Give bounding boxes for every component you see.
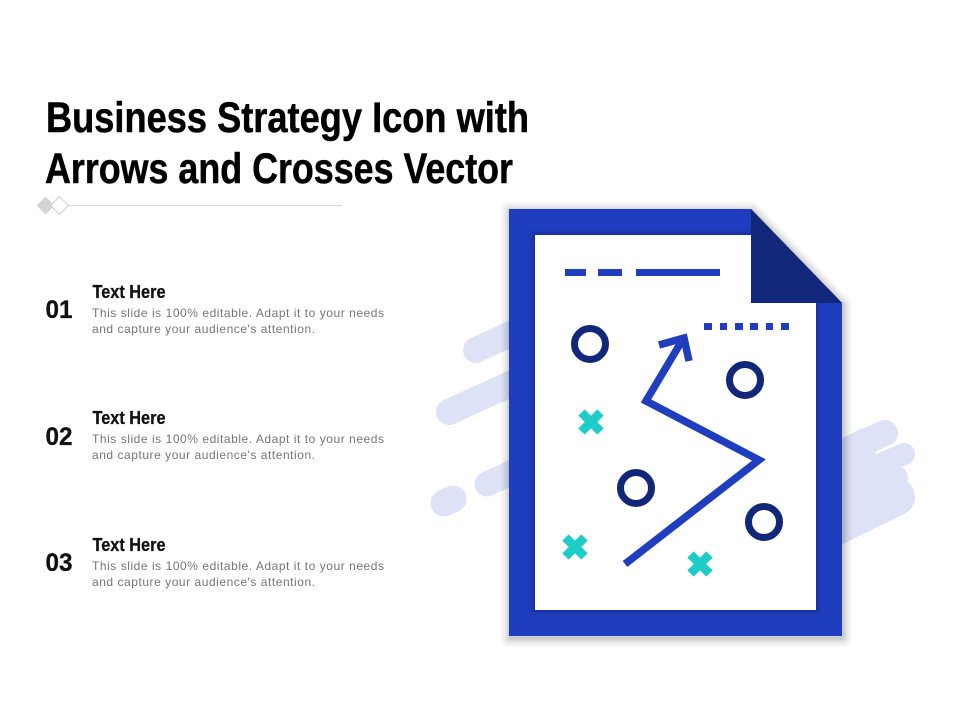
number 03: 03: [46, 549, 72, 577]
heading 02: Text Here: [92, 408, 166, 428]
document drop shadow: [510, 211, 843, 638]
background motion streaks: [444, 325, 904, 540]
list item 02: [46, 408, 384, 462]
document sheet: [535, 235, 816, 610]
title: Arrows and Crosses Vector: [45, 145, 513, 193]
description 01: and capture your audience's attention.: [92, 322, 315, 336]
dashed line: [565, 269, 720, 276]
document icon: [509, 209, 843, 638]
dotted line: [704, 323, 789, 330]
description 02: This slide is 100% editable. Adapt it to your needs: [92, 432, 384, 446]
sheet inner shadow: [535, 235, 816, 610]
description 03: This slide is 100% editable. Adapt it to your needs: [92, 559, 384, 573]
cross markers: [566, 412, 710, 574]
circle markers: [574, 328, 780, 538]
title: Business Strategy Icon with: [46, 94, 529, 142]
title divider with diamonds: [36, 196, 342, 214]
heading 01: Text Here: [92, 282, 166, 302]
folded corner: [751, 209, 842, 303]
description 01: This slide is 100% editable. Adapt it to your needs: [92, 306, 384, 320]
number 02: 02: [46, 423, 72, 451]
description 02: [92, 432, 384, 462]
document frame: [509, 209, 842, 636]
description 03: and capture your audience's attention.: [92, 575, 315, 589]
description 01: [92, 306, 384, 336]
number 01: 01: [46, 296, 73, 324]
title: [45, 94, 529, 193]
description 02: and capture your audience's attention.: [92, 448, 315, 462]
strategy arrow: [625, 338, 759, 564]
description 03: [92, 559, 384, 589]
heading 03: Text Here: [92, 535, 166, 555]
list item 03: [46, 535, 384, 589]
list item 01: [46, 282, 384, 336]
